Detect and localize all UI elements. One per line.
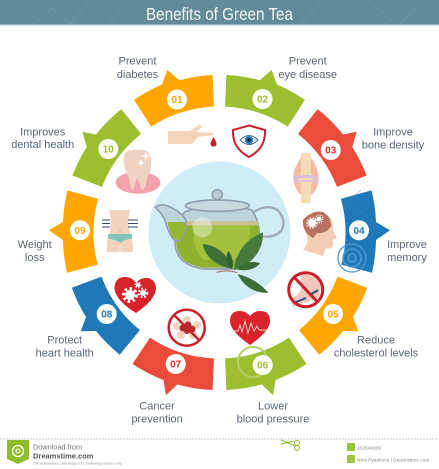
watermark footer: Dreamstime.com — [33, 452, 94, 460]
segment 05 — [299, 277, 367, 355]
icon: heart with gears — [114, 277, 156, 313]
icon: tooth in gum — [116, 150, 160, 194]
icon: dreamstime badge — [7, 440, 29, 464]
segment 01: 01 — [171, 95, 183, 106]
watermark footer: Download from — [33, 442, 82, 452]
watermark footer: 102646039 — [357, 446, 381, 452]
segment 08 — [72, 277, 140, 355]
label: protect heart health: heart health — [36, 348, 94, 360]
segment 06 — [225, 338, 306, 395]
central pale blue circle — [148, 162, 290, 304]
teapot with leaves — [155, 190, 283, 293]
watermark footer — [0, 439, 439, 466]
icon: slim waist — [102, 210, 138, 252]
label: improve memory: Improve — [387, 239, 427, 251]
icon: finger with blood drop — [168, 124, 217, 147]
label: weight loss: Weight — [18, 239, 52, 251]
segment 10: 10 — [103, 144, 114, 156]
label: cancer prevention: prevention — [131, 413, 183, 425]
label: improves dental health: dental health — [11, 139, 74, 151]
label: prevent diabetes: diabetes — [117, 69, 159, 81]
watermark footer: Nina Pyankova | Dreamstime.com — [357, 458, 429, 464]
segment 09 — [49, 190, 98, 273]
tea leaves — [203, 232, 268, 293]
segment 01 — [134, 70, 214, 127]
segment 08: 08 — [101, 310, 113, 320]
label: improve memory: memory — [387, 252, 427, 264]
segment 07: 07 — [170, 360, 182, 370]
label: protect heart health: Protect — [47, 335, 82, 347]
label: prevent diabetes: Prevent — [119, 56, 156, 68]
icon: knee joint — [293, 153, 319, 203]
label: prevent eye disease: Prevent — [289, 56, 327, 68]
label: weight loss: loss — [25, 252, 45, 264]
icon: blocked artery — [289, 273, 323, 307]
segment 10 — [72, 109, 141, 187]
segment 04: 04 — [353, 226, 365, 237]
segment 04 — [338, 190, 390, 273]
segment 07 — [132, 338, 214, 395]
label: reduce cholesterol levels: cholesterol levels — [334, 348, 419, 360]
label: improve bone density: bone density — [362, 140, 425, 152]
segment 06: 06 — [257, 360, 269, 372]
segment 09: 09 — [74, 226, 86, 237]
segment 05: 05 — [327, 310, 339, 320]
label: reduce cholesterol levels: Reduce — [357, 335, 395, 347]
icon: shield with eye — [233, 126, 265, 157]
segment 03: 03 — [325, 146, 337, 156]
label: improve bone density: Improve — [373, 126, 413, 138]
label: lower blood pressure: Lower — [258, 400, 288, 412]
icon: scissors — [281, 440, 300, 450]
header banner — [0, 0, 439, 26]
icon: heart with pulse line — [230, 311, 270, 345]
label: lower blood pressure: blood pressure — [237, 413, 309, 425]
label: cancer prevention: Cancer — [139, 400, 175, 412]
label: improves dental health: Improves — [20, 126, 65, 138]
segment 02: 02 — [257, 94, 268, 106]
segment 03 — [298, 109, 367, 187]
watermark footer: This watermarked comp image is for previewing purposes only. — [33, 462, 122, 466]
icon: crossed out cancer cells — [169, 310, 205, 346]
title: Benefits of Green Tea — [146, 4, 293, 24]
icon: head with brain gears — [303, 212, 337, 256]
label: prevent eye disease: eye disease — [278, 69, 337, 81]
segment 02 — [225, 70, 305, 127]
